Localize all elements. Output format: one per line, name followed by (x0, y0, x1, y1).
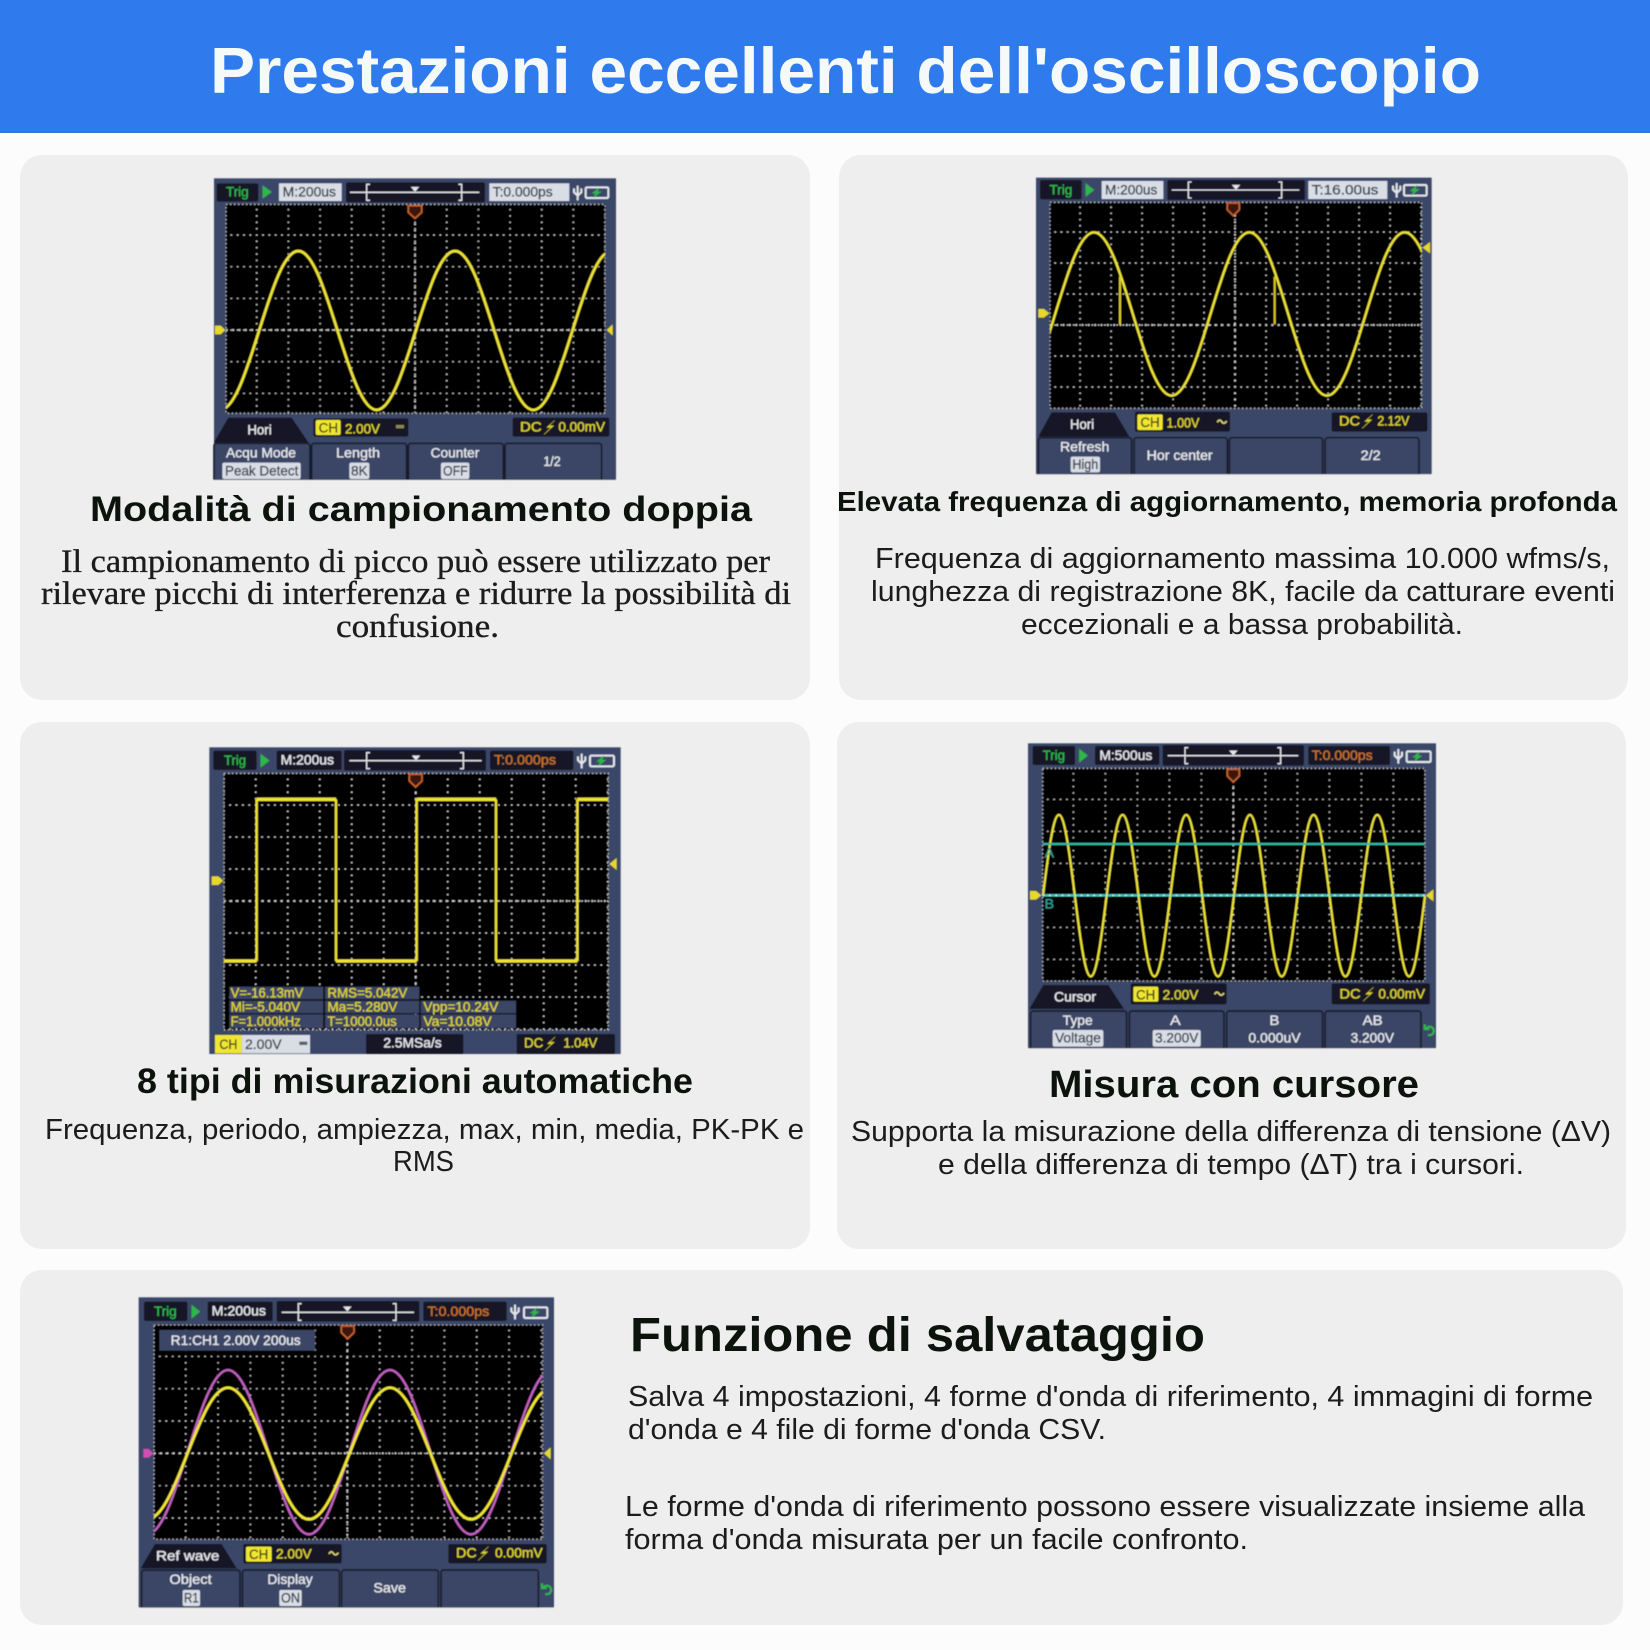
cursors A and B: A (1045, 845, 1055, 861)
oscilloscope screen: square wave with measurements (209, 747, 621, 1054)
oscilloscope screen: square wave with measurements: M:200us (281, 751, 334, 767)
body text: lunghezza di registrazione 8K, facile da catturare eventi (871, 576, 1615, 608)
body text: second paragraph: forma d'onda misurata per un facile confronto. (625, 1524, 1248, 1556)
oscilloscope screen: reference and measured waves: CH (249, 1546, 268, 1562)
oscilloscope screen: peak detect sine wave: CH (319, 420, 338, 436)
oscilloscope screen: peak detect sine wave (210, 178, 620, 485)
soft keys: 0.000uV (1248, 1029, 1301, 1045)
measurement readouts: Va=10.08V (423, 1013, 492, 1029)
heading: Elevata frequenza di aggiornamento, memoria profonda (837, 486, 1617, 517)
waveform: yellow sine with spikes (1049, 230, 1422, 398)
oscilloscope screen: peak detect sine wave: M:200us (283, 184, 336, 200)
panel: cursor measurement (837, 722, 1626, 1249)
measurement readouts: V=-16.13mV (231, 985, 304, 1001)
oscilloscope screen: square wave with measurements: 1.04V (563, 1035, 598, 1051)
cursors A and B (1043, 844, 1425, 911)
oscilloscope screen: peak detect sine wave: Hori (247, 421, 272, 437)
body text: second paragraph (625, 1491, 1586, 1556)
soft keys: ON (281, 1590, 300, 1606)
reference label (159, 1330, 315, 1351)
body text: second paragraph: Le forme d'onda di riferimento possono essere visualizzate insieme alla (625, 1491, 1586, 1523)
oscilloscope screen: sine wave with cursors: CH (1136, 986, 1155, 1002)
body text: Il campionamento di picco può essere utilizzato per (61, 544, 770, 580)
soft keys: A (1170, 1012, 1181, 1028)
soft keys: High (1072, 456, 1098, 472)
oscilloscope screen: square wave with measurements: CH (219, 1036, 237, 1052)
oscilloscope screen: reference and measured waves: M:200us (212, 1303, 266, 1319)
soft keys: Refresh (1060, 439, 1109, 455)
oscilloscope screen: square wave with measurements: Trig (224, 752, 246, 768)
oscilloscope screen: peak detect sine wave: Trig (226, 184, 249, 200)
soft keys: 3.200V (1155, 1029, 1199, 1045)
oscilloscope screen: sine wave with cursors: 2.00V (1163, 986, 1199, 1002)
oscilloscope screen: sine wave with glitch spikes: T:16.00us (1312, 181, 1378, 197)
panel: save function (20, 1270, 1623, 1625)
oscilloscope screen: sine wave with glitch spikes: 2.12V (1377, 413, 1410, 429)
oscilloscope screen: sine wave with glitch spikes: CH (1140, 414, 1160, 430)
oscilloscope screen: reference and measured waves: 0.00mV (495, 1545, 543, 1561)
oscilloscope screen: peak detect sine wave: 2.00V (345, 420, 381, 436)
oscilloscope screen: sine wave with glitch spikes: Trig (1049, 181, 1072, 197)
soft keys: R1 (184, 1590, 199, 1606)
soft keys: Acqu Mode (226, 445, 296, 461)
soft keys: 1/2 (543, 453, 561, 469)
measurement readouts: F=1.000kHz (231, 1013, 301, 1029)
soft keys: Display (267, 1571, 313, 1587)
soft keys: 3.200V (1351, 1029, 1395, 1045)
body text: Frequenza di aggiornamento massima 10.000 wfms/s, (875, 543, 1610, 575)
panel: high refresh rate, deep memory (837, 155, 1628, 700)
body text: first paragraph (628, 1381, 1593, 1446)
heading: Modalità di campionamento doppia (90, 490, 753, 529)
soft keys: AB (1363, 1012, 1383, 1028)
oscilloscope screen: peak detect sine wave: DC (520, 419, 542, 435)
soft keys: Peak Detect (225, 463, 298, 479)
body text: rilevare picchi di interferenza e ridurre la possibilità di (41, 576, 791, 612)
measurement readouts: Ma=5.280V (327, 999, 398, 1015)
oscilloscope screen: reference and measured waves: 2.00V (276, 1546, 312, 1562)
oscilloscope screen: sine wave with cursors: T:0.000ps (1312, 747, 1373, 763)
oscilloscope screen: sine wave with glitch spikes: Hori (1070, 416, 1094, 432)
waveform: yellow sine (1043, 815, 1425, 976)
soft keys: Save (373, 1580, 406, 1596)
body text: Supporta la misurazione della differenza di tensione (ΔV) (851, 1116, 1611, 1148)
oscilloscope screen: square wave with measurements: 2.5MSa/s (383, 1035, 442, 1051)
oscilloscope screen: sine wave with glitch spikes: M:200us (1105, 181, 1157, 197)
waveform: yellow sine (220, 251, 612, 410)
soft keys: Length (336, 445, 380, 461)
oscilloscope screen: sine wave with glitch spikes: DC (1339, 413, 1360, 429)
body text: first paragraph: d'onda e 4 file di forme d'onda CSV. (628, 1414, 1106, 1446)
waveforms: purple reference and yellow measured (147, 1370, 552, 1534)
measurement readouts: Mi=-5.040V (231, 999, 301, 1015)
soft keys: Type (1063, 1012, 1093, 1028)
body text: RMS (393, 1146, 454, 1178)
oscilloscope screen: peak detect sine wave: T:0.000ps (493, 184, 553, 200)
oscilloscope screen: reference and measured waves: DC (456, 1545, 477, 1561)
oscilloscope screen: sine wave with cursors: Cursor (1054, 989, 1096, 1005)
soft keys: B (1269, 1012, 1279, 1028)
oscilloscope screen: square wave with measurements: DC (524, 1035, 543, 1051)
body text: confusione. (336, 609, 499, 645)
body text: Frequenza, periodo, ampiezza, max, min, media, PK-PK e (45, 1114, 804, 1146)
measurement readouts (229, 985, 516, 1029)
oscilloscope screen: sine wave with glitch spikes (1016, 178, 1443, 479)
measurement readouts: T=1000.0us (327, 1013, 397, 1029)
soft keys (135, 1570, 558, 1612)
oscilloscope screen: sine wave with cursors: 0.00mV (1378, 985, 1426, 1001)
oscilloscope screen: sine wave with cursors: DC (1339, 985, 1361, 1001)
heading: 8 tipi di misurazioni automatiche (137, 1062, 693, 1101)
body text: eccezionali e a bassa probabilità. (1021, 609, 1463, 641)
measurement readouts: Vpp=10.24V (423, 999, 499, 1015)
oscilloscope screen: sine wave with glitch spikes: 1.00V (1167, 414, 1200, 430)
header banner (0, 0, 1650, 133)
soft keys: 8K (351, 463, 368, 479)
soft keys: Object (169, 1571, 212, 1587)
body text: first paragraph: Salva 4 impostazioni, 4 forme d'onda di riferimento, 4 immagini di forme (628, 1381, 1593, 1413)
body text: e della differenza di tempo (ΔT) tra i cursori. (938, 1149, 1524, 1181)
oscilloscope screen: sine wave with cursors (1025, 743, 1440, 1053)
title: Prestazioni eccellenti dell'oscilloscopio (210, 34, 1481, 107)
soft keys: 2/2 (1361, 447, 1381, 463)
panel: automatic measurements (20, 722, 810, 1249)
oscilloscope screen: sine wave with cursors: M:500us (1099, 747, 1152, 763)
oscilloscope screen: reference and measured waves: T:0.000ps (427, 1303, 489, 1319)
body text (41, 544, 791, 645)
heading: Misura con cursore (1049, 1064, 1419, 1106)
soft keys: OFF (443, 463, 468, 479)
oscilloscope screen: reference and measured waves: Ref wave (156, 1548, 220, 1564)
body text (871, 543, 1615, 641)
oscilloscope screen: peak detect sine wave: 0.00mV (558, 419, 606, 435)
body text (851, 1116, 1611, 1181)
reference label: R1:CH1 2.00V 200us (171, 1332, 301, 1348)
heading: Funzione di salvataggio (630, 1309, 1205, 1362)
measurement readouts: RMS=5.042V (327, 985, 408, 1001)
oscilloscope screen: reference and measured waves (135, 1297, 558, 1612)
soft keys: Hor center (1147, 447, 1213, 463)
oscilloscope screen: square wave with measurements: 2.00V (245, 1036, 282, 1052)
panel: dual sampling mode (20, 155, 810, 700)
waveform: yellow square wave (224, 799, 608, 961)
oscilloscope screen: reference and measured waves: Trig (154, 1303, 177, 1319)
cursors A and B: B (1045, 895, 1054, 911)
soft keys: Counter (431, 445, 480, 461)
body text (45, 1114, 804, 1178)
soft keys (210, 443, 620, 485)
oscilloscope screen: sine wave with cursors: Trig (1043, 747, 1065, 763)
soft keys (1032, 438, 1437, 479)
soft keys: Voltage (1055, 1029, 1101, 1045)
soft keys (1025, 1011, 1440, 1053)
oscilloscope screen: square wave with measurements: T:0.000ps (494, 751, 556, 767)
